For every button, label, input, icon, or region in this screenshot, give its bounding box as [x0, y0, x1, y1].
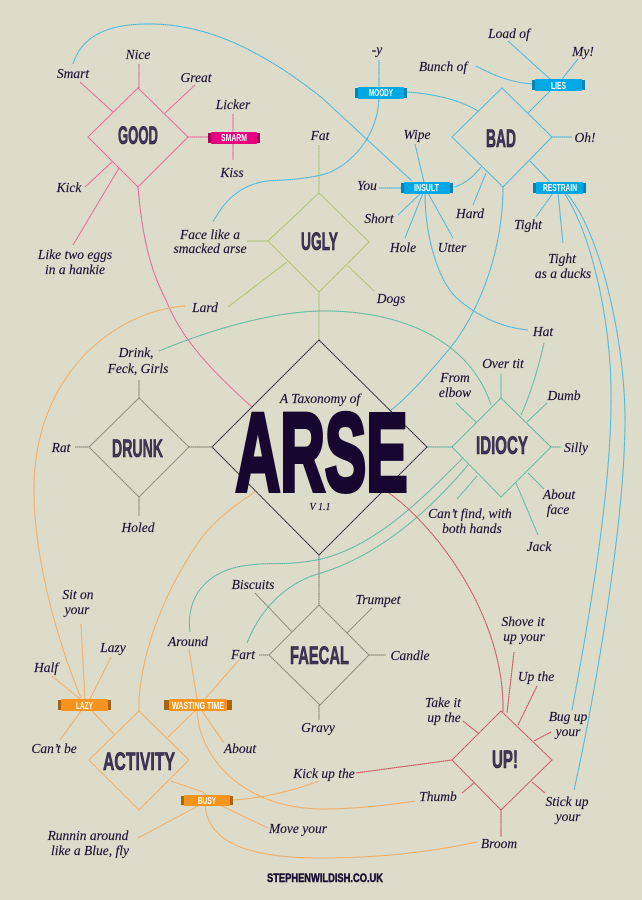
diamond: bad: [452, 88, 552, 187]
connectors: ugly: [228, 145, 374, 340]
label: Can't find, with both hands: Can’t find, with: [428, 506, 512, 521]
heading: ugly: UGLY: [301, 228, 338, 256]
label: Kick up the: Kick up the: [292, 766, 355, 781]
badge: smarm: [208, 132, 260, 144]
label: Shove it up your: Shove it: [501, 614, 546, 629]
heading: activity: ACTIVITY: [103, 748, 175, 776]
label: Utter: Utter: [438, 240, 467, 255]
label: Around: Around: [167, 634, 208, 649]
label: Over tit: Over tit: [482, 356, 525, 371]
diamond: ugly: [268, 193, 369, 292]
label: Jack: Jack: [527, 539, 552, 554]
label: Stick up your: your: [554, 809, 581, 824]
badge: smarm: SMARM: [221, 133, 247, 144]
badge: lies: [532, 79, 585, 92]
badge: busy: BUSY: [198, 796, 216, 807]
label: Kiss: Kiss: [219, 165, 244, 180]
label: Tight as a ducks: Tight: [548, 251, 577, 266]
label: -y: -y: [372, 42, 382, 57]
label: Sit on your: Sit on: [62, 587, 94, 602]
label: About face: About: [542, 487, 576, 502]
badge: busy: [181, 795, 233, 807]
connectors: idiocy: [159, 311, 561, 643]
badge: lies: LIES: [551, 81, 566, 92]
label: Drink, Feck, Girls: Feck, Girls: [107, 361, 168, 376]
label: My!: My!: [571, 44, 594, 59]
label: Up the: Up the: [518, 669, 554, 684]
label: Great: Great: [180, 70, 213, 85]
heading: drunk: DRUNK: [112, 435, 163, 463]
credit: STEPHENWILDISH.CO.UK: [267, 871, 383, 885]
panel: faecal: [230, 555, 430, 735]
label: Half: Half: [33, 660, 60, 675]
label: You: You: [357, 178, 377, 193]
connectors: drunk: [75, 380, 212, 516]
badge: wasting time: WASTING TIME: [172, 701, 224, 712]
diamond: faecal: [269, 605, 369, 705]
label: Stick up your: Stick up: [545, 794, 589, 809]
label: Thumb: Thumb: [419, 789, 457, 804]
label: Dogs: Dogs: [376, 291, 405, 306]
label: Broom: Broom: [481, 836, 517, 851]
heading: up: UP!: [492, 746, 518, 774]
label: Trumpet: Trumpet: [355, 592, 402, 607]
label: Nice: Nice: [125, 47, 150, 62]
label: Biscuits: Biscuits: [232, 577, 274, 592]
label: Silly: Silly: [564, 440, 588, 455]
label: Gravy: Gravy: [301, 720, 335, 735]
badge: moody: MOODY: [369, 88, 393, 99]
panel: bad: [73, 24, 625, 790]
version: V 1.1: [310, 502, 330, 513]
label: Oh!: Oh!: [574, 130, 596, 145]
label: Take it up the: up the: [427, 710, 461, 725]
connectors: bad: [73, 24, 625, 790]
badge: insult: INSULT: [414, 183, 439, 194]
heading: bad: BAD: [486, 125, 516, 153]
label: Fat: Fat: [310, 128, 331, 143]
heading: good: GOOD: [118, 122, 158, 150]
diamond: good: [88, 88, 188, 187]
badge: insult: [401, 182, 453, 194]
label: Dumb: Dumb: [546, 388, 581, 403]
heading: idiocy: IDIOCY: [476, 432, 528, 460]
connectors: activity: [34, 306, 477, 858]
label: Fart: Fart: [230, 647, 256, 662]
panel: up: [292, 493, 589, 851]
label: From elbow: elbow: [439, 385, 471, 400]
label: Runnin around like a Blue, fly: Runnin around: [47, 828, 129, 843]
label: Face like a smacked arse: smacked arse: [173, 241, 247, 256]
panel: central title: [212, 340, 427, 555]
label: Hat: Hat: [532, 324, 554, 339]
label: Can't find, with both hands: both hands: [442, 521, 502, 536]
connectors: up: [356, 493, 551, 837]
label: Bunch of: Bunch of: [419, 59, 469, 74]
badge: lazy: LAZY: [76, 701, 93, 712]
diamond: activity: [89, 711, 189, 810]
label: Take it up the: Take it: [425, 695, 462, 710]
label: Bug up your: your: [554, 724, 581, 739]
label: Candle: Candle: [390, 648, 430, 663]
label: Smart: Smart: [57, 66, 90, 81]
badge: moody: [355, 87, 407, 99]
label: Licker: Licker: [215, 97, 251, 112]
label: Bug up your: Bug up: [549, 709, 588, 724]
panel: drunk: [51, 345, 212, 535]
panel: idiocy: [159, 311, 588, 643]
label: Can't be: Can’t be: [31, 741, 77, 756]
label: Sit on your: your: [63, 602, 90, 617]
label: Tight: Tight: [514, 217, 543, 232]
label: Lazy: Lazy: [99, 640, 126, 655]
diamond: idiocy: [452, 398, 551, 497]
label: Like two eggs in a hankie: in a hankie: [45, 262, 105, 277]
connectors: faecal: [255, 555, 386, 720]
label: Runnin around like a Blue, fly: like a Blue, fly: [51, 843, 129, 858]
label: About face: face: [547, 502, 569, 517]
label: Shove it up your: up your: [503, 629, 546, 644]
diamond: up: [452, 711, 552, 810]
panel: ugly: [173, 128, 405, 340]
diamond: central: [212, 340, 427, 555]
badge: restrain: [533, 182, 586, 194]
label: Move your: Move your: [268, 821, 328, 836]
label: Rat: Rat: [51, 440, 72, 455]
label: Drink, Feck, Girls: Drink,: [118, 345, 153, 360]
label: Holed: Holed: [120, 520, 155, 535]
subtitle: A Taxonomy of: [279, 391, 362, 406]
panel: good: [37, 47, 260, 407]
label: Lard: Lard: [191, 300, 218, 315]
label: Tight as a ducks: as a ducks: [535, 266, 591, 281]
label: Face like a smacked arse: Face like a: [179, 227, 240, 242]
label: Like two eggs in a hankie: Like two eggs: [37, 247, 112, 262]
label: Hard: Hard: [455, 206, 484, 221]
title: ARSE: ARSE: [236, 392, 408, 514]
label: Wipe: Wipe: [404, 127, 431, 142]
diamond: drunk: [89, 398, 189, 497]
label: Load of: Load of: [487, 26, 532, 41]
label: Hole: Hole: [389, 240, 416, 255]
badge: restrain: RESTRAIN: [543, 183, 577, 194]
panel: activity: [31, 306, 477, 858]
connectors: good: [73, 64, 252, 407]
heading: faecal: FAECAL: [290, 642, 349, 670]
label: Short: Short: [364, 211, 395, 226]
badge: lazy: [58, 699, 111, 712]
label: About: About: [223, 741, 257, 756]
label: Kick: Kick: [56, 180, 82, 195]
label: From elbow: From: [439, 370, 470, 385]
badge: wasting time: [164, 699, 232, 712]
